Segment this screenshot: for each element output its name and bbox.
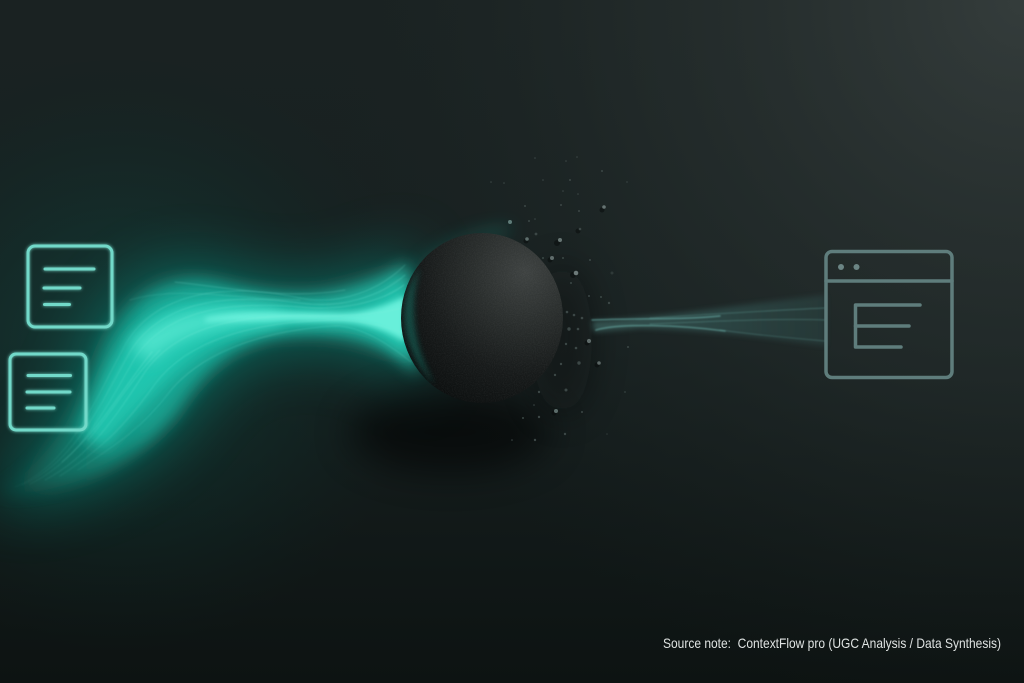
stream soft core left — [130, 310, 280, 362]
stream bright core — [205, 296, 405, 342]
sphere shadow — [350, 265, 592, 472]
sphere teal rim — [404, 268, 435, 385]
stream fine strands — [15, 265, 411, 487]
icon: output browser window — [826, 252, 952, 378]
sphere surface grain — [400, 232, 564, 404]
dark sphere — [400, 232, 564, 404]
stream outer glow — [0, 245, 425, 502]
wisp strands — [592, 308, 825, 341]
teal data stream — [0, 245, 425, 502]
icon: document top-left — [28, 246, 112, 327]
scattered particles — [490, 156, 629, 441]
particle shadows — [524, 208, 604, 416]
teal halo above sphere — [415, 226, 515, 280]
stream mid band — [80, 278, 408, 450]
stream body — [0, 262, 418, 496]
icon: document bottom-left — [10, 354, 86, 430]
residual wisp toward output window — [592, 295, 826, 346]
wisp haze — [592, 295, 826, 346]
